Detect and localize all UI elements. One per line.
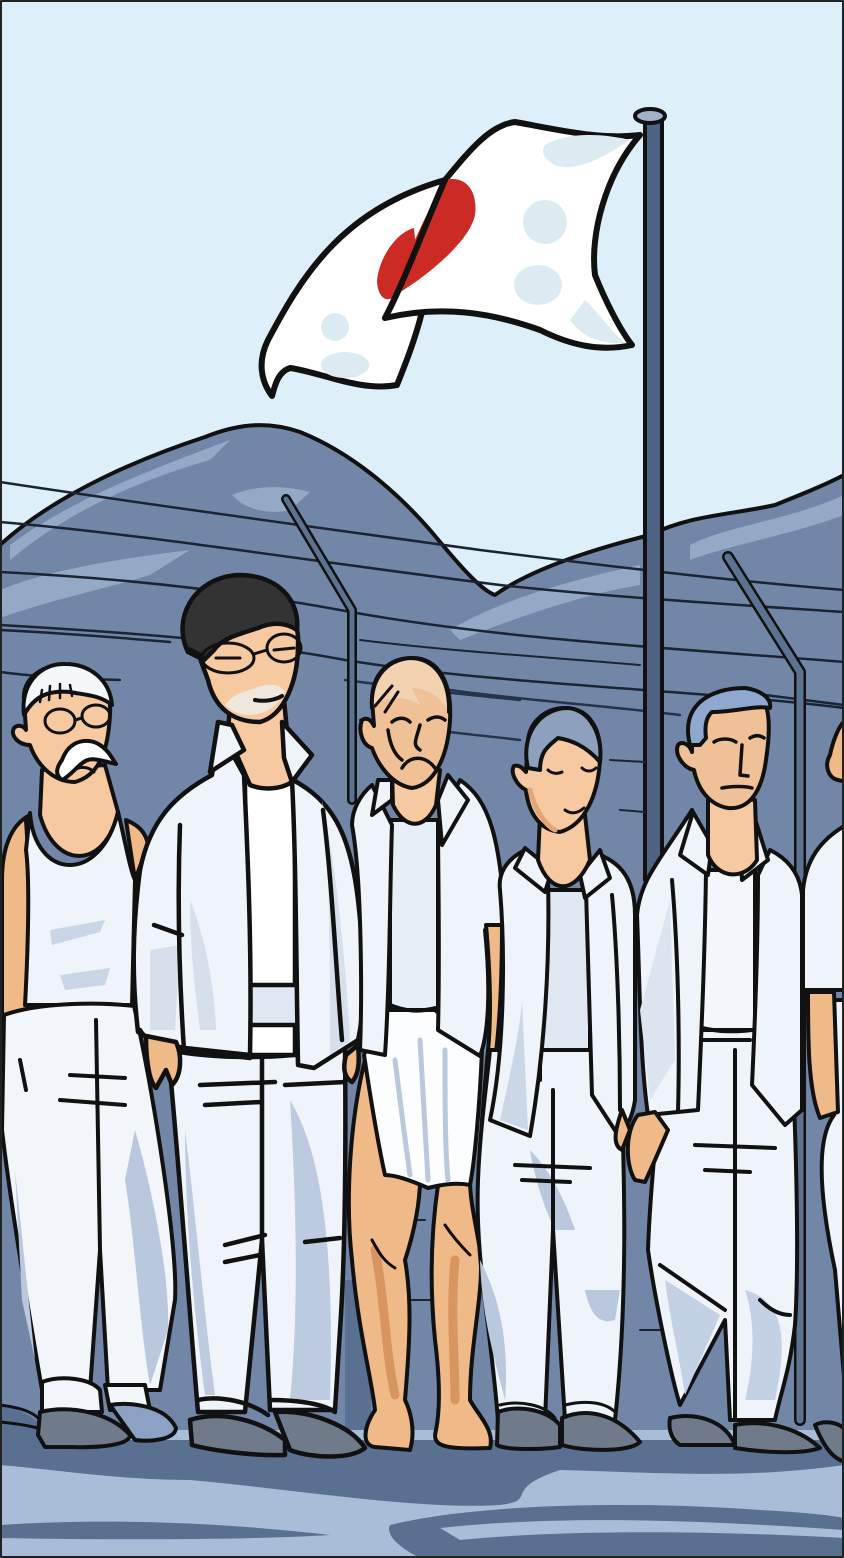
shoes <box>190 1416 285 1455</box>
head fragment <box>827 720 844 782</box>
hair <box>526 708 600 770</box>
fence post left <box>286 499 352 800</box>
hand right <box>344 1045 359 1082</box>
ground <box>0 1405 844 1558</box>
glasses <box>188 634 301 673</box>
shirt <box>245 770 295 1055</box>
collar <box>372 780 392 815</box>
arm <box>482 925 502 1120</box>
glasses and moustache <box>45 705 110 733</box>
person 4: short-haired man <box>478 708 640 1450</box>
collar <box>515 848 552 892</box>
red disc: front fold <box>392 179 475 297</box>
jacket right <box>586 855 635 1135</box>
shirt <box>390 820 438 1010</box>
neck <box>392 770 440 824</box>
fence post right <box>728 557 800 1420</box>
arms <box>2 815 40 1095</box>
trousers <box>822 1000 844 1400</box>
fence post lower <box>345 1280 371 1445</box>
head <box>677 690 769 808</box>
fence planks <box>360 640 660 1330</box>
jacket right <box>438 780 505 1056</box>
person 2: man with glasses and open jacket <box>134 575 365 1456</box>
face <box>714 736 764 788</box>
person 6: partial figure at right edge <box>803 720 844 1462</box>
neck <box>228 700 292 788</box>
person 1: old man with moustache <box>2 664 176 1447</box>
mountains <box>0 425 844 1450</box>
face <box>388 717 445 768</box>
person 3: bald man in loincloth <box>349 658 505 1450</box>
jacket left <box>352 785 392 1055</box>
trousers <box>168 1045 345 1412</box>
hair <box>372 658 449 712</box>
jacket right <box>285 730 363 1068</box>
jacket left <box>490 850 548 1136</box>
jacket <box>803 825 844 990</box>
shoes <box>42 1378 102 1412</box>
arm <box>808 992 838 1118</box>
flagpole <box>635 109 665 880</box>
loincloth <box>364 1010 482 1188</box>
flag shading <box>321 135 630 378</box>
hand <box>628 1112 668 1182</box>
flag <box>262 122 640 396</box>
collar <box>680 812 712 875</box>
hair <box>688 688 770 745</box>
fence wires <box>0 482 844 740</box>
face <box>548 768 596 813</box>
trousers <box>478 1050 624 1420</box>
neck <box>538 815 590 886</box>
shoe <box>815 1422 844 1462</box>
hand left <box>146 1036 180 1088</box>
shoes <box>669 1416 735 1445</box>
head <box>196 595 298 722</box>
neck <box>708 795 757 874</box>
jacket right <box>752 850 802 1125</box>
collar <box>210 722 244 772</box>
stubble <box>225 685 285 715</box>
legs <box>349 1060 420 1450</box>
person 5: man with blue crew cut <box>628 688 820 1452</box>
head <box>360 658 450 788</box>
head <box>13 665 110 782</box>
tank top <box>25 812 135 1005</box>
shirt <box>700 870 755 1030</box>
red disc: back fold <box>377 228 416 299</box>
trousers <box>648 1030 797 1420</box>
head <box>513 708 600 832</box>
shoes <box>497 1408 560 1449</box>
hand <box>616 1110 630 1150</box>
shirt <box>540 890 590 1050</box>
hair <box>183 575 297 660</box>
trousers <box>2 1004 175 1390</box>
jacket left <box>637 810 706 1115</box>
jacket left <box>134 728 251 1055</box>
neck <box>40 765 118 856</box>
